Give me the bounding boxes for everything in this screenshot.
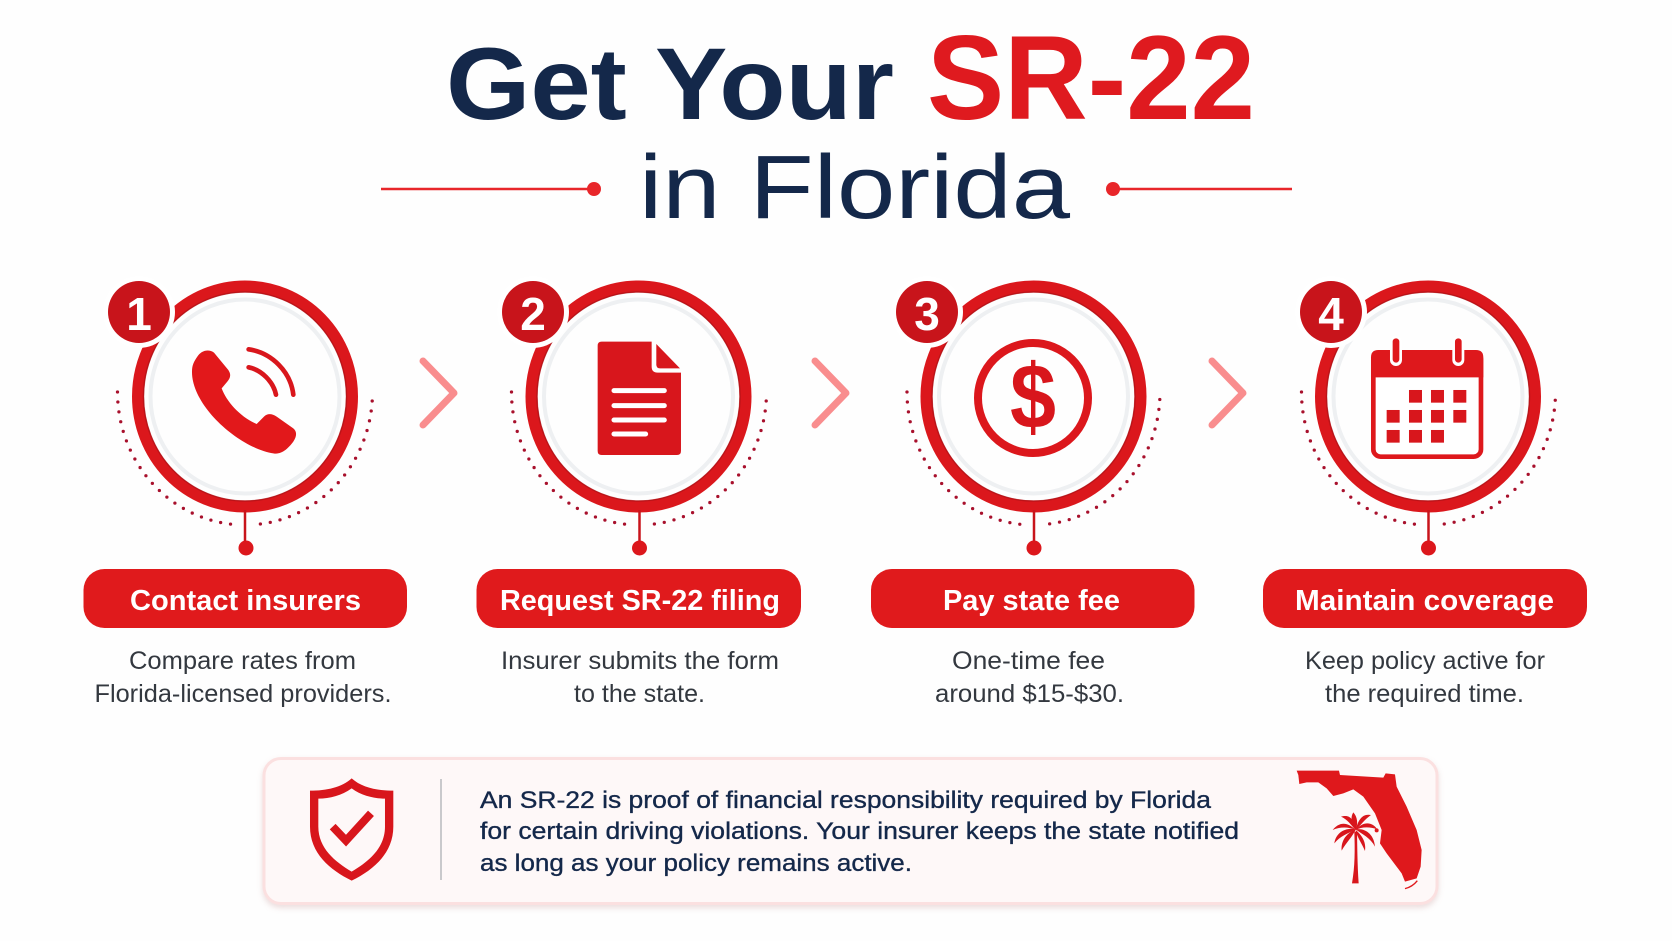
description [94,647,392,708]
description [935,647,1124,708]
step 3: Pay state fee [871,276,1194,708]
connector [1026,510,1042,556]
ring [138,286,352,506]
dotted arc [118,392,373,525]
description: to the state. [574,680,705,708]
step 2: Request SR-22 filing [476,276,801,708]
description: Compare rates from [129,647,356,675]
panel background [264,758,1437,904]
icon: dollar coin [978,343,1088,453]
step 4: Maintain coverage [1263,276,1587,708]
dotted arc [512,392,766,525]
description [1305,647,1545,708]
subheading: in Florida: in Florida [639,138,1071,238]
heading: Get Your SR-22: SR-22 [927,11,1255,145]
dotted arc [1302,392,1556,525]
description: Keep policy active for [1305,647,1545,675]
ring [1321,286,1535,506]
icon: phone [192,349,296,454]
palm tree [1333,812,1377,883]
Florida silhouette [1297,771,1422,889]
label pill: Request SR-22 filing [500,585,780,617]
label pill [871,569,1194,628]
panel: SR-22 explanation [264,758,1437,904]
icon: dollar coin: $ [1010,346,1056,448]
number badge 3 [891,276,963,348]
arrow 1 [423,361,454,425]
icon: Florida map with palm [1297,771,1422,889]
label pill: Contact insurers [130,585,361,617]
number badge 3: 3 [914,288,940,340]
ring [532,286,746,506]
explanation text: An SR-22 is proof of financial responsibility required by Florida [480,787,1212,814]
icon: document [598,342,681,455]
number badge 1: 1 [126,288,152,340]
icon: calendar [1371,342,1483,457]
arrow 2 [815,361,846,425]
description [501,647,779,708]
description: Insurer submits the form [501,647,779,675]
title rule left [381,182,601,196]
number badge 4 [1295,276,1367,348]
label pill [84,569,407,628]
icon: shield check [310,778,393,881]
description: around $15-$30. [935,680,1124,708]
number badge 4: 4 [1318,288,1344,340]
title [381,11,1292,238]
arrow 3 [1212,361,1243,425]
connector [632,510,647,556]
description: One-time fee [952,647,1105,675]
number badge 2: 2 [520,288,546,340]
explanation text: for certain driving violations. Your insurer keeps the state notified [480,818,1239,845]
dotted arc [907,392,1160,525]
number badge 2 [497,276,569,348]
description: the required time. [1325,680,1524,708]
description: Florida-licensed providers. [94,680,392,708]
number badge 1 [103,276,175,348]
step 1: Contact insurers [84,276,407,708]
heading: Get Your SR-22: Get Your [446,27,894,141]
heading: Get Your SR-22 [446,11,1255,145]
label pill: Maintain coverage [1295,585,1554,617]
explanation text [480,787,1239,877]
divider [440,779,442,880]
label pill: Pay state fee [943,585,1120,617]
title rule right [1106,182,1292,196]
connector [1421,510,1436,556]
label pill [1263,569,1587,628]
label pill [476,569,801,628]
connector [238,510,254,556]
ring [926,286,1140,506]
explanation text: as long as your policy remains active. [480,850,912,877]
